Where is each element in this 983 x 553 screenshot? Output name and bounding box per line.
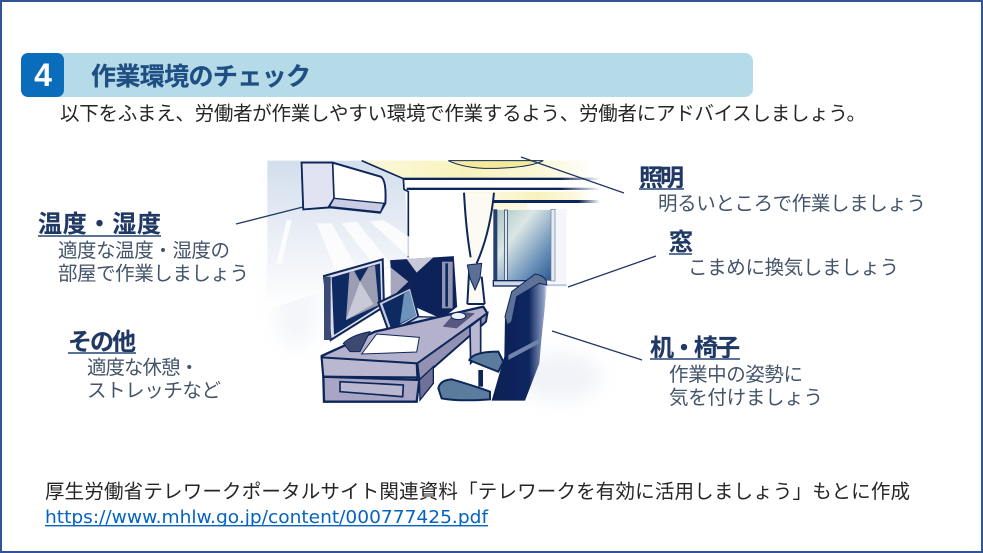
wall and ceiling edge: [362, 161, 600, 257]
label: desk and chair: 机・椅子: [650, 335, 740, 362]
label: desk and chair: 作業中の姿勢に: [669, 364, 803, 386]
intro sentence: 以下をふまえ、労働者が作業しやすい環境で作業するよう、労働者にアドバイスしましょう。: [60, 103, 866, 125]
PC tower: [391, 257, 457, 318]
label: desk and chair: 気を付けましょう: [669, 387, 823, 409]
office chair: [438, 274, 547, 401]
label: window: こまめに換気しましょう: [688, 257, 899, 279]
heading: 作業環境のチェック: [91, 63, 311, 91]
number badge: 4: [34, 57, 52, 93]
number badge: [21, 53, 64, 97]
room backdrop: [267, 161, 595, 310]
banner bar: [22, 53, 753, 97]
callout line: window: [568, 256, 656, 287]
icon: air conditioner: [302, 163, 386, 213]
label: temperature and humidity: [38, 211, 249, 285]
label: other: その他: [68, 329, 136, 356]
label: other: ストレッチなど: [87, 380, 221, 402]
label: temperature and humidity: 適度な温度・湿度の: [58, 240, 230, 262]
label: desk and chair: [650, 335, 823, 409]
label: other: 適度な休憩・: [87, 357, 199, 379]
title banner: [21, 53, 753, 97]
desk: [322, 307, 487, 402]
laptop: [378, 287, 443, 335]
label: lighting: 照明: [639, 165, 684, 192]
callout line: desk and chair: [552, 331, 642, 360]
illustration: home office room: [267, 161, 600, 402]
callout line: lighting: [521, 157, 624, 193]
label: temperature and humidity: 部屋で作業しましょう: [58, 263, 249, 285]
ceiling light: [448, 161, 543, 168]
label: lighting: [639, 165, 926, 215]
source link: https://www.mhlw.go.jp/content/000777425.pdf: [45, 507, 489, 528]
label: other: [68, 329, 221, 402]
window: [493, 209, 567, 287]
label: window: 窓: [669, 229, 693, 256]
callout line: air conditioner: [236, 207, 303, 224]
label: window: [669, 229, 899, 279]
soft backdrop shading: [273, 217, 600, 400]
cold air streams: [277, 220, 440, 273]
source note: 厚生労働省テレワークポータルサイト関連資料「テレワークを有効に活用しましょう」もとに作成: [45, 481, 910, 503]
curtain: [464, 193, 494, 304]
label: temperature and humidity: 温度・湿度: [38, 211, 161, 238]
label: lighting: 明るいところで作業しましょう: [658, 193, 926, 215]
monitor: [324, 259, 384, 340]
